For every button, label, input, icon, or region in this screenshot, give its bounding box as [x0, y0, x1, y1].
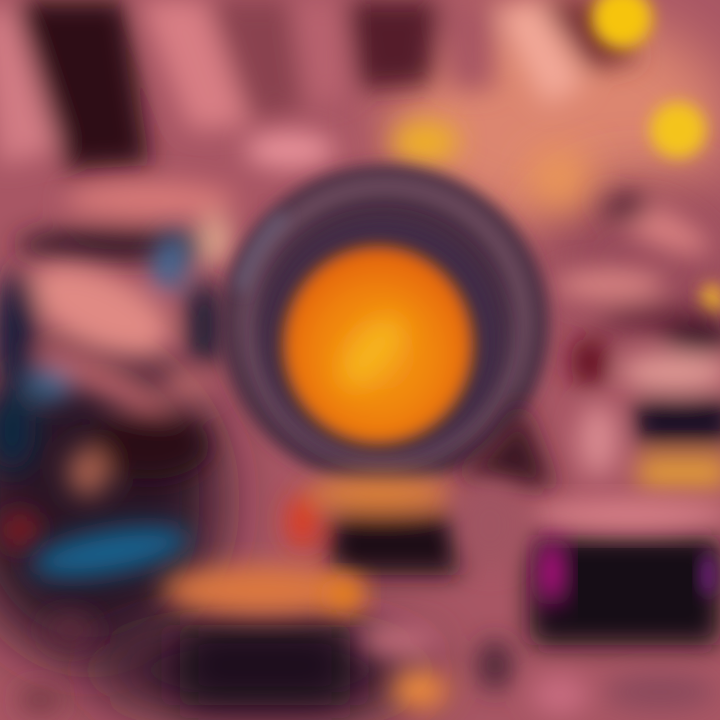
central bottom disc [287, 477, 460, 575]
ring around the core [221, 165, 555, 490]
orange lens and dark base [162, 566, 363, 705]
orange core [283, 246, 473, 444]
top stripes [0, 0, 640, 170]
bottom debris [18, 481, 715, 715]
yellow glowing spots [391, 0, 720, 316]
left side discs [0, 229, 227, 550]
right bottom dark cylinder [530, 500, 720, 645]
blue lens [27, 516, 193, 588]
horizontal pink band [15, 132, 335, 266]
right side stacked discs [555, 183, 720, 486]
